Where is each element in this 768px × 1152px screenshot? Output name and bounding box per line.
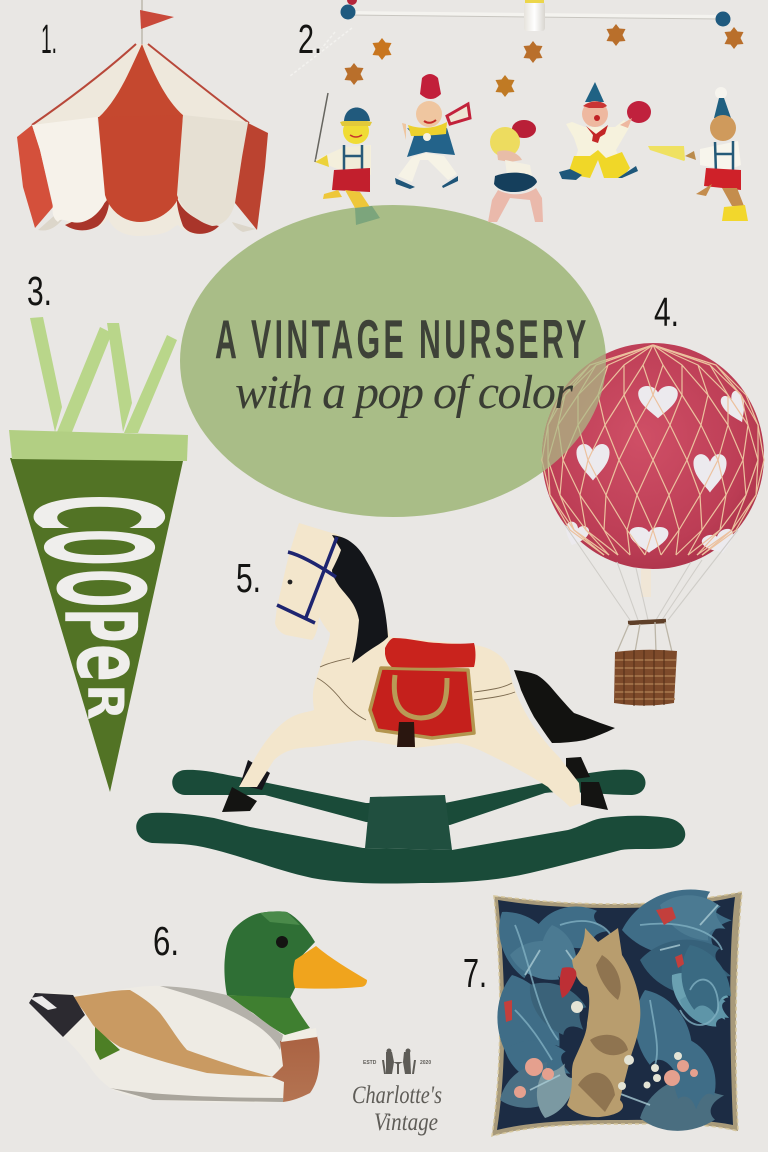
bridle — [277, 537, 337, 623]
fox tongue — [560, 967, 576, 998]
white flowers — [571, 1001, 682, 1090]
mobile bar — [340, 0, 730, 31]
pennant header — [9, 430, 188, 461]
logo est: ESTD — [363, 1060, 377, 1066]
balloon net — [542, 345, 764, 555]
back rocker — [172, 770, 646, 825]
left white panel — [32, 117, 108, 223]
pink flowers — [514, 1058, 698, 1098]
mane — [332, 535, 388, 663]
pennant name: P — [41, 608, 157, 642]
green overlay on balloon — [542, 354, 606, 472]
right white panel — [177, 115, 248, 226]
roof edge lines — [32, 44, 249, 125]
pennant ties — [30, 317, 177, 433]
item 1: circus tent lampshade — [17, 0, 268, 236]
duck lower shade — [110, 1088, 283, 1102]
duck body — [29, 986, 320, 1103]
far rear hoof — [566, 757, 590, 780]
hooves — [222, 787, 257, 812]
title ellipse — [180, 205, 606, 517]
clown 3 — [488, 120, 543, 222]
pennant name: O — [29, 569, 168, 607]
item 5: rocking horse — [136, 523, 685, 883]
red flowers — [504, 907, 684, 1022]
basket ring — [628, 621, 666, 623]
roof centre red — [98, 44, 184, 118]
pennant name — [0, 494, 196, 720]
balloon envelope — [542, 343, 764, 569]
stirrup — [394, 675, 447, 718]
clown 2 — [395, 74, 470, 189]
duck neck ring — [281, 1028, 317, 1042]
number 3: 3. — [27, 268, 52, 314]
item 6: mallard duck — [29, 911, 367, 1103]
basket — [614, 650, 677, 706]
duck eye — [276, 936, 288, 948]
fox — [567, 928, 640, 1117]
logo figures — [382, 1048, 416, 1074]
item 3: Cooper pennant — [0, 317, 196, 792]
number 7: 7. — [463, 950, 487, 996]
clown 5 — [648, 87, 748, 221]
right red panel — [235, 123, 268, 230]
item 2: clown mobile — [290, 0, 748, 225]
cushion base — [497, 897, 735, 1130]
tail — [514, 670, 615, 743]
title: A VINTAGE NURSERY — [215, 310, 586, 370]
saddle strap — [397, 722, 415, 747]
pennant name: R — [76, 684, 133, 720]
logo script bottom: Vintage — [374, 1109, 438, 1136]
number labels: 1. — [41, 16, 57, 62]
balloon ropes — [565, 525, 738, 620]
clown 4 — [559, 82, 651, 180]
front rocker — [136, 813, 685, 883]
platform — [365, 795, 452, 850]
centre red panel — [98, 115, 183, 222]
pennant body — [10, 458, 183, 792]
logo: Charlotte's Vintage — [352, 1048, 442, 1136]
duck head — [224, 911, 315, 998]
duck grey back — [160, 986, 283, 1050]
item 4: hot air balloon — [541, 343, 765, 706]
number labels — [27, 16, 679, 996]
duck tail — [29, 993, 85, 1037]
pennant name: O — [11, 529, 183, 566]
pennant name: e — [55, 644, 163, 682]
number 4: 4. — [654, 289, 679, 335]
saddle seat — [385, 638, 476, 668]
subtitle: with a pop of color — [235, 366, 573, 419]
balloon hearts — [561, 386, 752, 558]
number 2: 2. — [298, 16, 322, 62]
left red panel — [17, 125, 53, 228]
duck neck — [227, 995, 310, 1035]
item 7: woodland fox cushion — [483, 884, 742, 1142]
duck chest — [272, 1036, 320, 1102]
body lines — [317, 658, 515, 720]
far front leg — [240, 760, 270, 790]
duck wing — [73, 990, 273, 1077]
acanthus leaves — [483, 884, 739, 1142]
number 5: 5. — [236, 555, 261, 601]
fox markings — [578, 955, 628, 1112]
number 6: 6. — [153, 918, 179, 964]
roof whites — [32, 44, 249, 125]
decorative scratches — [290, 28, 352, 76]
duck green patch — [95, 1027, 120, 1060]
logo year: 2020 — [420, 1060, 431, 1066]
logo script top: Charlotte's — [352, 1082, 442, 1109]
saddle flap — [370, 668, 474, 738]
duck bill — [293, 946, 367, 989]
under scallops — [65, 195, 219, 236]
leaf veins — [515, 905, 722, 1105]
horse body — [239, 523, 581, 807]
eye — [288, 580, 292, 584]
stars — [344, 24, 744, 97]
clown 1 — [315, 93, 380, 225]
cushion trim — [492, 892, 742, 1136]
balloon nozzle — [641, 569, 651, 597]
